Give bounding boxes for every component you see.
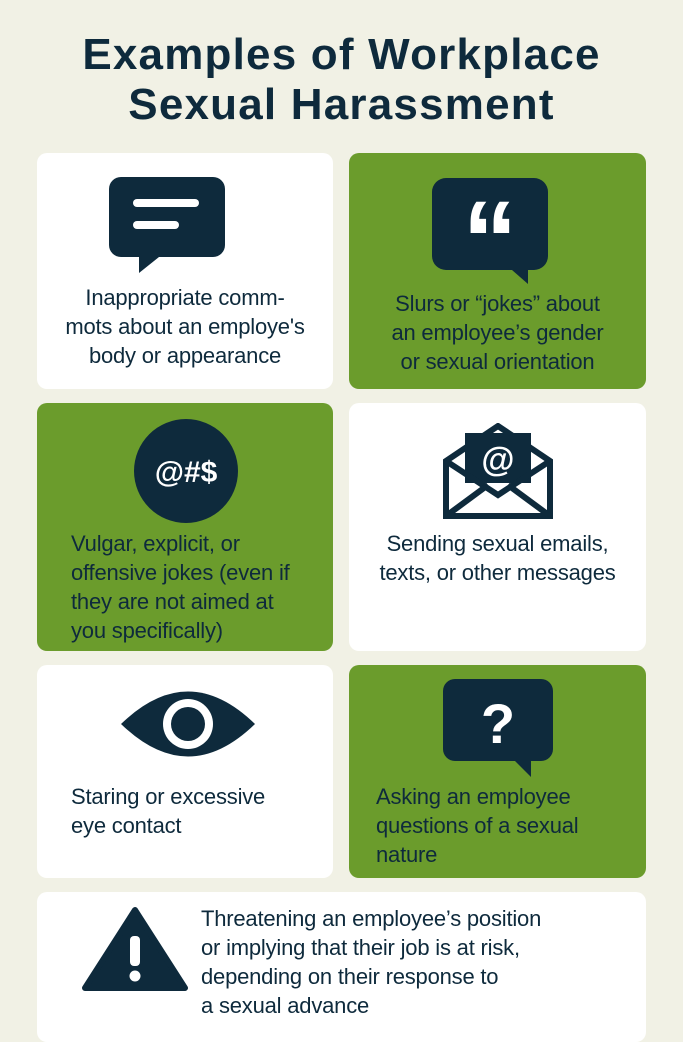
icon: speech bubble [109, 177, 225, 273]
text: texts, or other messages [379, 560, 616, 585]
text [71, 784, 265, 838]
text [65, 285, 305, 368]
icon: symbols circle [134, 419, 238, 523]
text: Staring or excessive [71, 784, 265, 809]
text: or sexual orientation [401, 349, 594, 374]
title: Sexual Harassment [128, 80, 555, 129]
text: nature [376, 842, 437, 867]
text: body or appearance [89, 343, 281, 368]
text: or implying that their job is at risk, [201, 935, 520, 960]
text: an employee’s gender [391, 320, 604, 345]
icon: envelope [443, 423, 553, 519]
icon: eye [121, 692, 255, 756]
text: Asking an employee [376, 784, 571, 809]
text: they are not aimed at [71, 589, 273, 614]
panel: slurs [349, 153, 646, 389]
text [379, 531, 616, 585]
icon: question bubble [443, 679, 553, 777]
icon: symbols circle: @#$ [155, 456, 218, 489]
text: depending on their response to [201, 964, 498, 989]
title: Examples of Workplace [82, 30, 601, 79]
panel: asking questions [349, 665, 646, 878]
icon: question bubble: ? [481, 692, 515, 755]
text: offensive jokes (even if [71, 560, 290, 585]
text: Inappropriate comm- [85, 285, 285, 310]
text: Threatening an employee’s position [201, 906, 541, 931]
panel: threatening [37, 892, 646, 1042]
text: a sexual advance [201, 993, 369, 1018]
title [82, 30, 601, 129]
text: Vulgar, explicit, or [71, 531, 240, 556]
text [376, 784, 578, 867]
panel: vulgar jokes [37, 403, 333, 651]
text: eye contact [71, 813, 181, 838]
text: Sending sexual emails, [387, 531, 608, 556]
icon: warning triangle [82, 907, 188, 991]
panel: sexual emails [349, 403, 646, 651]
panel: staring [37, 665, 333, 878]
icon: envelope: @ [481, 441, 515, 479]
text: mots about an employe's [65, 314, 305, 339]
text [201, 906, 541, 1018]
text [391, 291, 604, 374]
text: questions of a sexual [376, 813, 578, 838]
text: Slurs or “jokes” about [395, 291, 600, 316]
icon: quote bubble [432, 178, 548, 284]
text: you specifically) [71, 618, 223, 643]
panel: inappropriate comments [37, 153, 333, 389]
text [71, 531, 290, 643]
